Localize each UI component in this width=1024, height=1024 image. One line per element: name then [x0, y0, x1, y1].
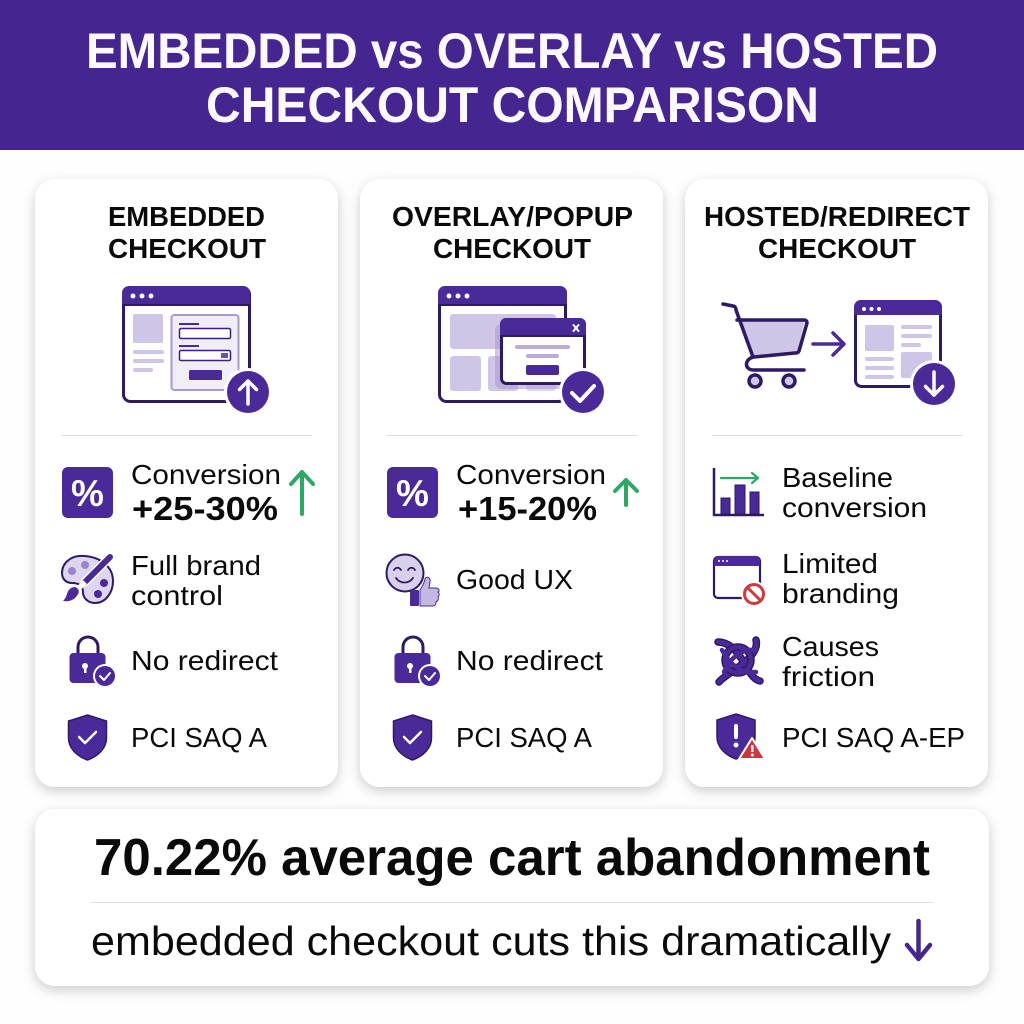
text: no redirect: No redirect — [131, 645, 278, 676]
text: conversion uplift: +25-30% — [132, 490, 278, 527]
heading: hosted/redirect checkout: HOSTED/REDIRECT — [704, 201, 970, 232]
icon: palette and brush — [62, 556, 113, 603]
text: baseline conversion: conversion — [782, 492, 927, 523]
text: causes friction: friction — [782, 661, 875, 692]
icon: baseline bar chart — [714, 468, 764, 515]
text: conversion uplift: Conversion — [456, 459, 606, 490]
text: limited branding: branding — [782, 578, 899, 609]
heading: hosted/redirect checkout — [704, 201, 970, 264]
icon: hosted page window with down badge — [854, 300, 958, 408]
icon: shield with check — [68, 715, 106, 760]
icon: percent badge — [387, 467, 438, 518]
text: abandonment statistic: 70.22% average cart abandonment — [94, 829, 930, 887]
icon: arrow to hosted page — [813, 333, 844, 355]
icon: embedded form in browser window — [122, 286, 272, 416]
text: good ux: Good UX — [456, 564, 573, 595]
text: conversion uplift: Conversion — [131, 459, 281, 490]
icon: window with prohibited sign — [714, 556, 767, 607]
text: baseline conversion: Baseline — [782, 462, 893, 493]
icon: percent badge — [62, 467, 113, 518]
panel: overlay/popup checkout — [360, 179, 663, 787]
text: embedded checkout note: embedded checkout cuts this dramatically — [91, 918, 892, 964]
icon: smiley with thumbs up — [386, 554, 441, 606]
text: full brand control — [131, 550, 261, 611]
text: limited branding — [782, 548, 899, 609]
icon: shield with warning — [717, 714, 765, 759]
icon: lock with check — [70, 637, 117, 688]
heading: embedded checkout: EMBEDDED — [108, 201, 265, 232]
text: full brand control: control — [131, 580, 223, 611]
title banner: EMBEDDED vs OVERLAY vs HOSTED — [86, 23, 938, 79]
text: pci saq a-ep: PCI SAQ A-EP — [782, 722, 965, 753]
panel: cart abandonment callout — [35, 809, 989, 986]
text: no redirect: No redirect — [456, 645, 603, 676]
icon: shopping cart — [723, 304, 807, 387]
heading: embedded checkout — [108, 201, 266, 264]
icon: popup over browser window — [438, 286, 607, 416]
title banner: CHECKOUT COMPARISON — [206, 77, 819, 133]
heading: overlay/popup checkout: CHECKOUT — [433, 233, 591, 264]
icon: lock with check — [394, 637, 442, 688]
text: conversion uplift — [456, 459, 606, 527]
text: conversion uplift — [131, 459, 281, 527]
panel: embedded checkout — [35, 179, 338, 787]
text: baseline conversion — [782, 462, 927, 523]
icon: purple down arrow — [907, 921, 930, 959]
heading: overlay/popup checkout: OVERLAY/POPUP — [392, 201, 633, 232]
heading: overlay/popup checkout — [392, 201, 633, 264]
icon: green up arrow — [291, 472, 313, 514]
icon: percent badge: % — [396, 473, 429, 514]
icon: shield with check — [394, 715, 432, 760]
heading: hosted/redirect checkout: CHECKOUT — [758, 233, 916, 264]
panel: hosted/redirect checkout — [685, 179, 988, 787]
title banner — [0, 0, 1024, 150]
text: causes friction — [782, 631, 879, 692]
heading: embedded checkout: CHECKOUT — [108, 233, 266, 264]
icon: green up arrow — [615, 480, 637, 505]
text: full brand control: Full brand — [131, 550, 261, 581]
icon: percent badge: % — [71, 473, 104, 514]
text: conversion uplift: +15-20% — [458, 490, 597, 527]
text: causes friction: Causes — [782, 631, 879, 662]
text: pci saq a: PCI SAQ A — [456, 722, 592, 753]
text: pci saq a: PCI SAQ A — [131, 722, 267, 753]
icon: tangled knot — [718, 640, 760, 682]
text: limited branding: Limited — [782, 548, 878, 579]
